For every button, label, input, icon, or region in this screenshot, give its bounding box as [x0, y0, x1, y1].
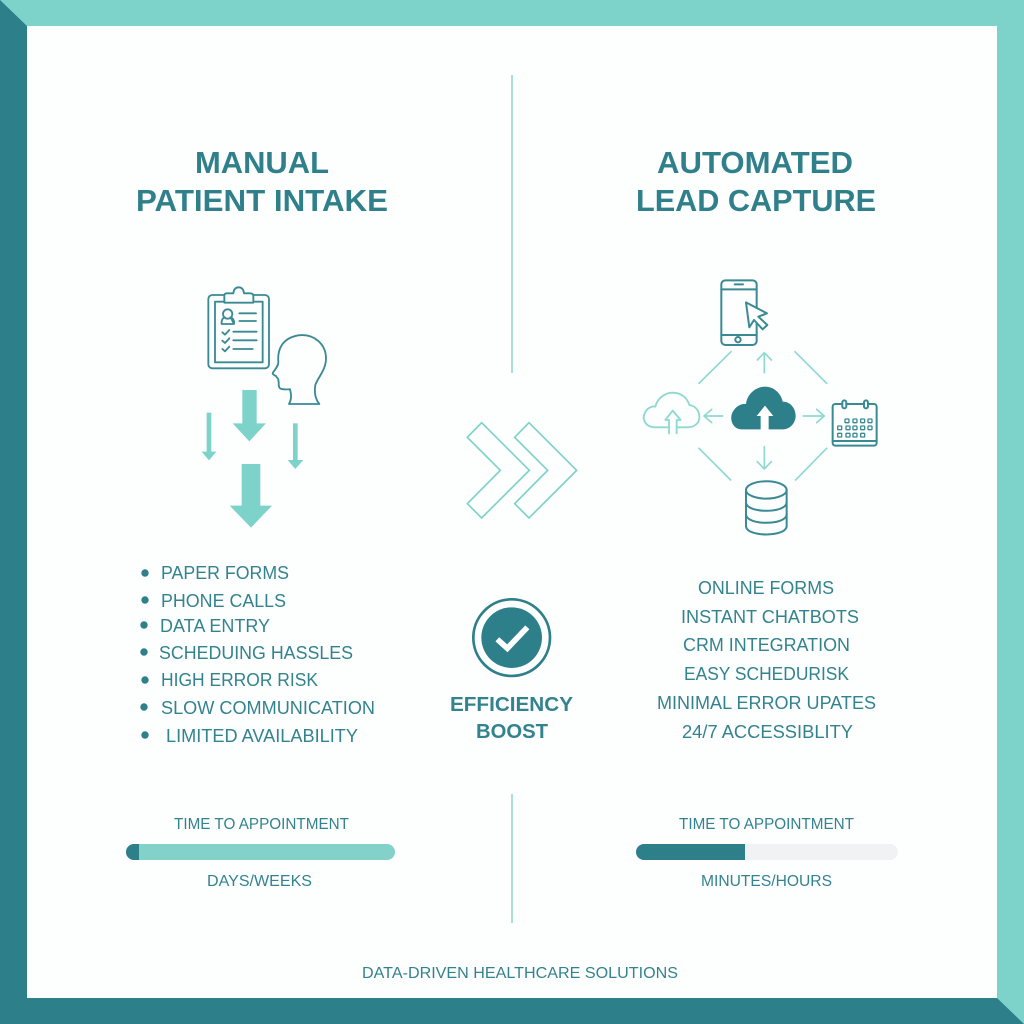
connectors and arrows — [699, 352, 827, 480]
list: automated benefits: MINIMAL ERROR UPATES — [657, 693, 876, 713]
metric: automated time to appointment: TIME TO APPOINTMENT — [679, 816, 854, 833]
list: automated benefits: 24/7 ACCESSIBLITY — [682, 722, 853, 742]
metric: automated time to appointment — [636, 816, 898, 890]
list: manual drawbacks: PHONE CALLS — [161, 591, 286, 611]
label: efficiency boost: EFFICIENCY — [450, 694, 574, 716]
list: manual drawbacks: PAPER FORMS — [161, 563, 289, 583]
diagram: automation hub — [644, 280, 877, 534]
list: manual drawbacks — [140, 563, 375, 746]
heading: manual patient intake — [136, 146, 388, 218]
metric: automated time to appointment: MINUTES/HOURS — [701, 873, 832, 890]
panel: manual patient intake — [126, 146, 395, 890]
heading: manual patient intake: MANUAL — [195, 146, 329, 180]
label: efficiency boost — [450, 694, 574, 743]
list: automated benefits: EASY SCHEDURISK — [684, 664, 849, 684]
heading: manual patient intake: PATIENT INTAKE — [136, 184, 388, 218]
icon: clipboard and head — [208, 287, 326, 404]
footer: DATA-DRIVEN HEALTHCARE SOLUTIONS — [362, 965, 678, 982]
icon: calendar — [833, 400, 877, 446]
list: manual drawbacks: SLOW COMMUNICATION — [161, 698, 375, 718]
metric: manual time to appointment: TIME TO APPOINTMENT — [174, 816, 349, 833]
icon: smartphone with cursor — [721, 280, 767, 345]
list: manual drawbacks: SCHEDUING HASSLES — [159, 643, 353, 663]
list: manual drawbacks: LIMITED AVAILABILITY — [166, 726, 358, 746]
icon: central cloud upload — [731, 387, 796, 430]
label: efficiency boost: BOOST — [476, 721, 548, 743]
list: automated benefits: INSTANT CHATBOTS — [681, 607, 859, 627]
panel: automated lead capture — [636, 146, 898, 890]
list: manual drawbacks: HIGH ERROR RISK — [161, 670, 318, 690]
heading: automated lead capture — [636, 146, 876, 218]
heading: automated lead capture: LEAD CAPTURE — [636, 184, 876, 218]
list: automated benefits — [657, 578, 876, 742]
icon: check badge — [473, 599, 550, 676]
panel: center transition — [450, 423, 577, 743]
icon: downward arrows — [202, 390, 303, 528]
list: automated benefits: CRM INTEGRATION — [683, 635, 850, 655]
metric: manual time to appointment — [126, 816, 395, 890]
icon: database — [746, 481, 787, 534]
heading: automated lead capture: AUTOMATED — [657, 146, 853, 180]
icon: double chevron — [467, 423, 577, 518]
icon: outline cloud upload — [644, 393, 699, 433]
list: automated benefits: ONLINE FORMS — [698, 578, 834, 598]
metric: manual time to appointment: DAYS/WEEKS — [207, 873, 312, 890]
list: manual drawbacks: DATA ENTRY — [160, 616, 270, 636]
